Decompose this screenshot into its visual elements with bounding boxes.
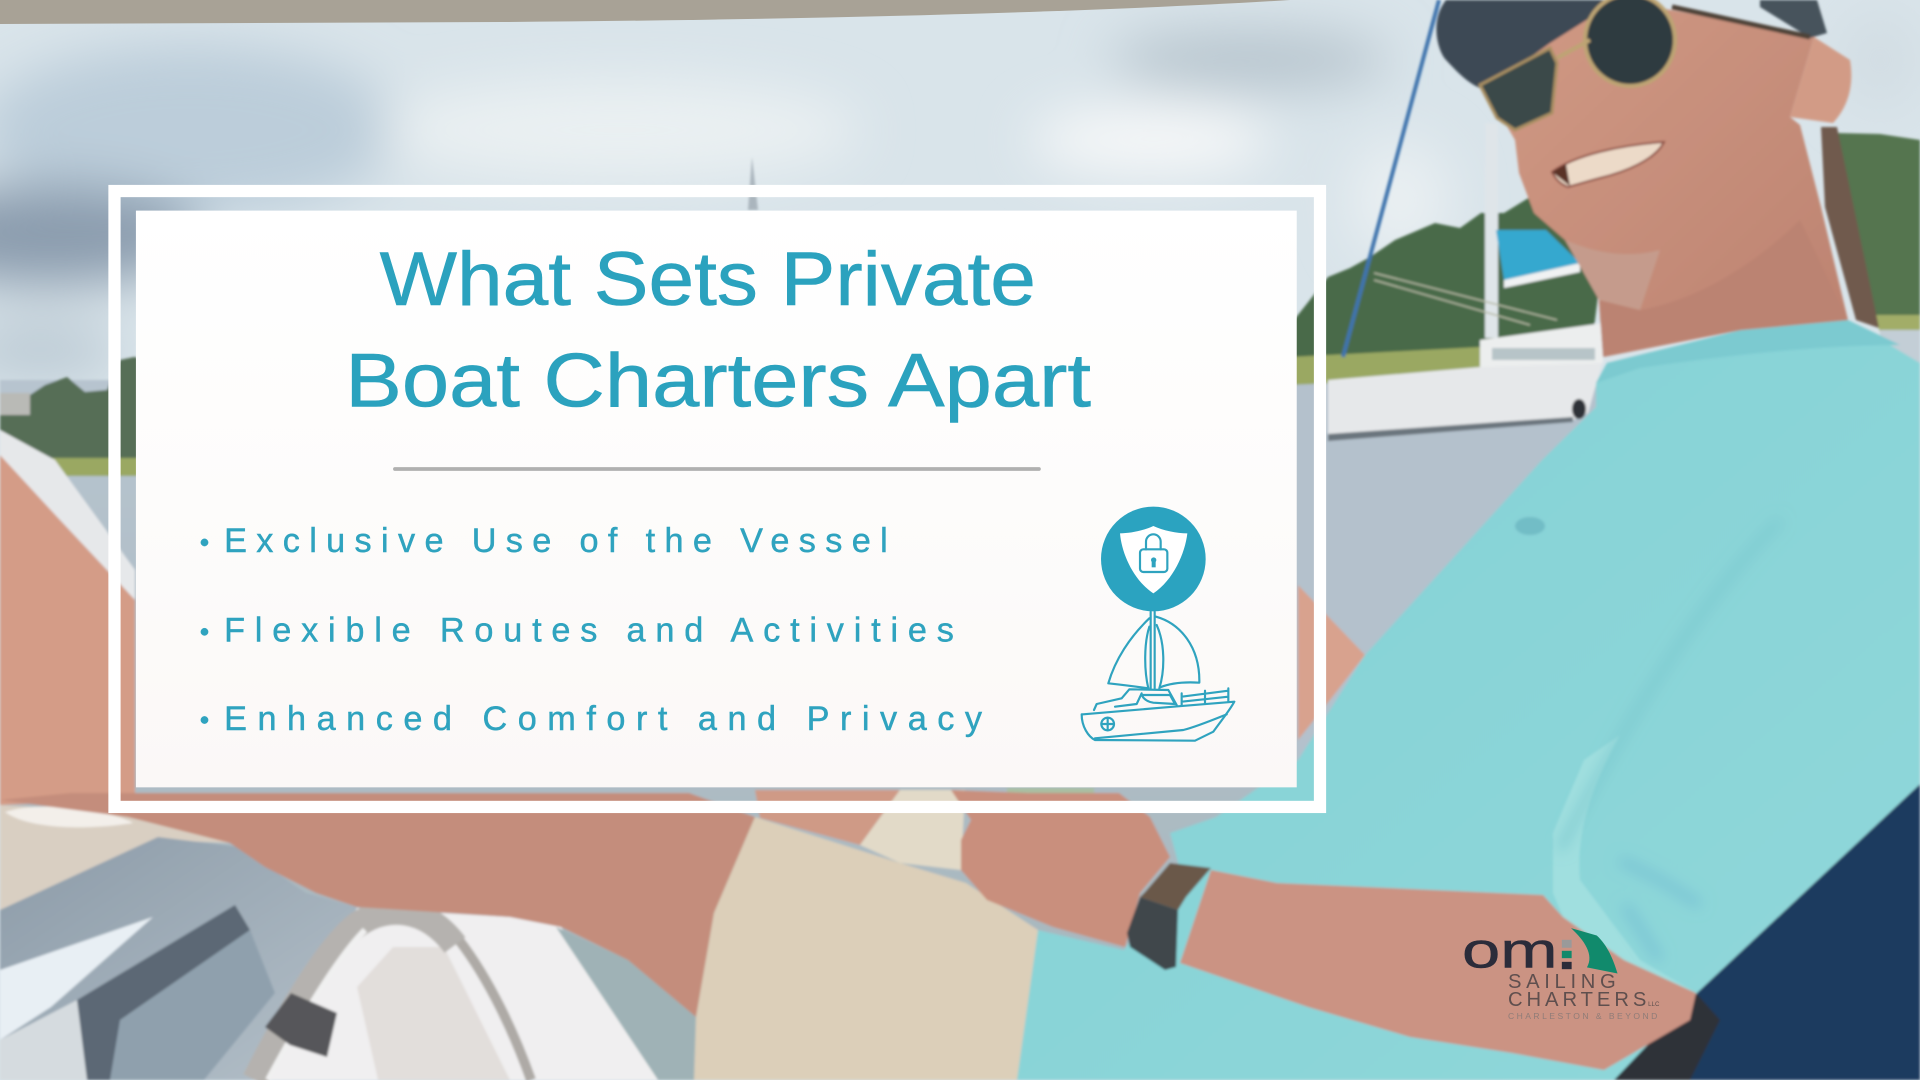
forearm, hand and watch — [951, 790, 1696, 1070]
sky with clouds — [0, 0, 1920, 560]
logo mark: om — [1462, 922, 1558, 978]
catamaran in the distance — [1328, 0, 1603, 441]
logo wordmark — [1508, 971, 1660, 1021]
logo wordmark: LLC — [1648, 1001, 1660, 1008]
icon: shield with padlock above sailboat — [1082, 507, 1234, 741]
bullet: flexible routes: Flexible Routes and Activities — [224, 612, 954, 650]
logo wordmark: SAILING — [1508, 971, 1616, 993]
logo wordmark: CHARLESTON & BEYOND — [1508, 1011, 1657, 1021]
drink held in hand — [1007, 788, 1094, 802]
icon: sailboat — [1082, 612, 1234, 741]
leg and khaki shorts — [0, 790, 1038, 1080]
bullet: exclusive use: Exclusive Use of the Vessel — [224, 522, 888, 560]
turquoise long-sleeve shirt — [1017, 320, 1920, 1080]
panel background — [136, 211, 1297, 787]
bullet: enhanced comfort: Enhanced Comfort and Privacy — [224, 700, 983, 738]
top canopy edge — [0, 0, 1290, 24]
divider — [393, 467, 1041, 471]
distant mast — [748, 157, 758, 210]
raised left arm behind body — [1298, 585, 1365, 740]
bullet list — [201, 522, 983, 738]
logo mark — [1462, 922, 1618, 978]
head with cap, sunglasses and smile — [1436, 0, 1879, 357]
white outer frame — [114, 191, 1320, 807]
title — [345, 237, 1091, 424]
content panel — [136, 211, 1297, 787]
title: Boat Charters Apart — [345, 339, 1091, 424]
bare foot and white towel at left — [0, 430, 135, 805]
boat deck and console — [0, 805, 696, 1080]
title: What Sets Private — [380, 237, 1036, 322]
logo: OMI Sailing Charters — [1462, 922, 1660, 1021]
navy seat — [1604, 784, 1920, 1080]
logo wordmark: CHARTERS — [1508, 989, 1646, 1011]
icon: security shield badge — [1101, 507, 1206, 611]
